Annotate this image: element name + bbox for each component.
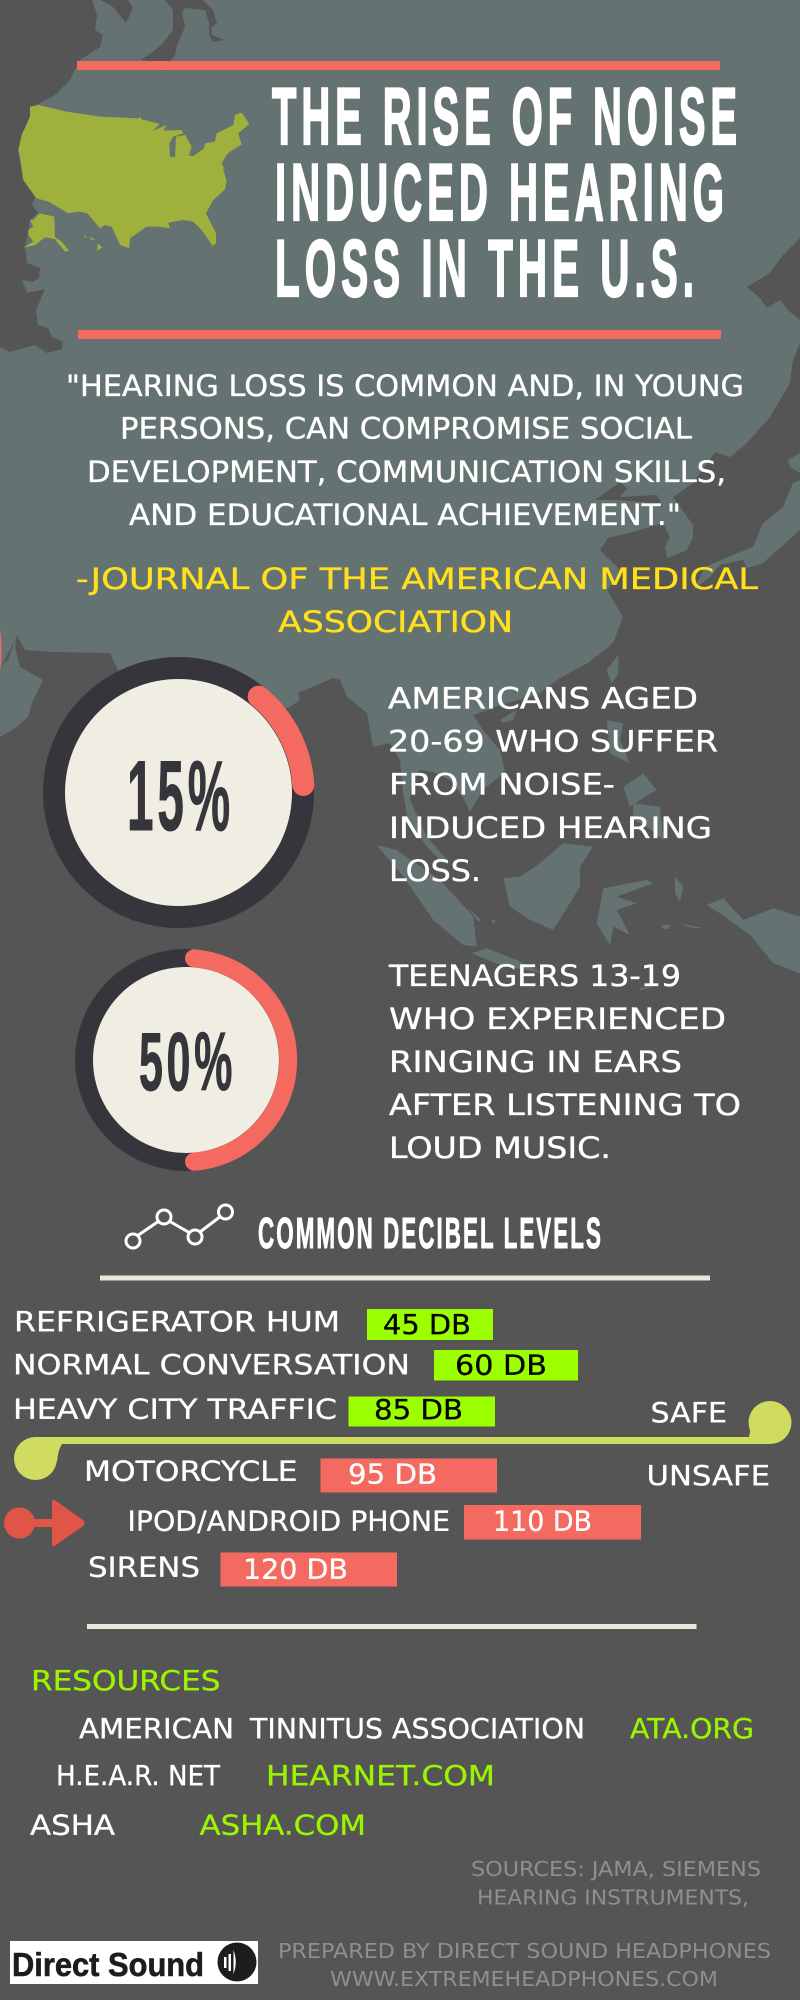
stat: 15 percent description: INDUCED HEARING (389, 811, 712, 845)
prepared by: PREPARED BY DIRECT SOUND HEADPHONES (278, 1939, 771, 1963)
row: sirens 120 dB: 120 DB (243, 1552, 348, 1586)
top red bar (77, 61, 720, 70)
row: normal conversation 60 dB (13, 1348, 578, 1382)
logo: Direct Sound: Direct Sound (12, 1946, 204, 1983)
quote attribution: ASSOCIATION (278, 605, 513, 639)
row: refrigerator hum 45 dB: REFRIGERATOR HUM (14, 1305, 340, 1338)
row: motorcycle 95 dB (84, 1454, 497, 1492)
bottom red bar (78, 330, 721, 339)
prepared by: WWW.EXTREMEHEADPHONES.COM (330, 1967, 718, 1991)
row: iPod/Android phone 110 dB (128, 1504, 641, 1540)
resource: American Tinnitus Association (79, 1712, 754, 1745)
stat: 15 percent description: FROM NOISE- (389, 768, 615, 802)
safe/unsafe divider (14, 1401, 792, 1480)
resource: H.E.A.R. Net (56, 1759, 495, 1792)
resource: ASHA (30, 1808, 366, 1842)
row: refrigerator hum 45 dB (14, 1305, 493, 1341)
sources (471, 1857, 761, 1910)
title (272, 72, 742, 314)
quote (66, 369, 744, 532)
icon: map of the United States (18, 105, 249, 252)
South-East Asian islands (377, 655, 800, 991)
row: normal conversation 60 dB: 60 DB (455, 1348, 547, 1382)
quote: AND EDUCATIONAL ACHIEVEMENT." (129, 498, 681, 532)
row: heavy city traffic 85 dB: 85 DB (374, 1393, 463, 1426)
world map background (0, 0, 800, 991)
stat: 50 percent description: LOUD MUSIC. (389, 1131, 611, 1165)
stat: 15 percent description: 20-69 WHO SUFFER (388, 724, 718, 758)
resources heading: RESOURCES (31, 1664, 220, 1697)
stat: 15 percent description (388, 682, 718, 888)
stat: 15 percent donut (43, 657, 314, 928)
row: refrigerator hum 45 dB: 45 DB (383, 1308, 471, 1341)
Japan (693, 480, 800, 590)
row: heavy city traffic 85 dB (13, 1392, 495, 1426)
resource: American Tinnitus Association: AMERICAN (79, 1712, 234, 1745)
stat: 50 percent description: AFTER LISTENING TO (389, 1088, 741, 1122)
row: sirens 120 dB: SIRENS (88, 1550, 200, 1584)
label: unsafe: UNSAFE (646, 1459, 770, 1492)
resource: ASHA: ASHA (30, 1808, 115, 1842)
sources: SOURCES: JAMA, SIEMENS (471, 1857, 761, 1881)
stat: 50 percent donut (75, 949, 297, 1171)
quote: "HEARING LOSS IS COMMON AND, IN YOUNG (66, 369, 744, 403)
dark water inlets (2, 0, 663, 665)
row: motorcycle 95 dB: MOTORCYCLE (84, 1454, 298, 1488)
stat: 50 percent donut: 50% (139, 1015, 236, 1108)
prepared by (278, 1939, 771, 1991)
quote attribution (76, 562, 758, 639)
resource: H.E.A.R. Net: HEARNET.COM (266, 1759, 495, 1792)
resource: H.E.A.R. Net: H.E.A.R. NET (56, 1759, 221, 1792)
stat: 50 percent description: RINGING IN EARS (389, 1045, 682, 1079)
quote: DEVELOPMENT, COMMUNICATION SKILLS, (87, 455, 726, 489)
resource: American Tinnitus Association: TINNITUS ASSOCIATION (249, 1712, 585, 1745)
row: iPod/Android phone 110 dB: IPOD/ANDROID PHONE (128, 1504, 450, 1538)
resource: American Tinnitus Association: ATA.ORG (630, 1712, 754, 1745)
arrow (4, 1500, 84, 1546)
row: motorcycle 95 dB: 95 DB (348, 1458, 437, 1490)
quote attribution: -JOURNAL OF THE AMERICAN MEDICAL (76, 562, 758, 596)
label: safe: SAFE (650, 1396, 727, 1429)
pink edge arc (0, 628, 2, 672)
stat: 50 percent description: WHO EXPERIENCED (389, 1002, 726, 1036)
row: iPod/Android phone 110 dB: 110 DB (493, 1504, 592, 1538)
sources: HEARING INSTRUMENTS, (477, 1886, 749, 1910)
resource: ASHA: ASHA.COM (200, 1808, 366, 1842)
stat: 50 percent description (388, 959, 741, 1165)
row: sirens 120 dB (88, 1550, 397, 1586)
stat: 15 percent description: LOSS. (389, 854, 481, 888)
icon: line chart (126, 1205, 232, 1248)
row: normal conversation 60 dB: NORMAL CONVERSATION (13, 1348, 410, 1381)
stat: 50 percent description: TEENAGERS 13-19 (388, 959, 681, 993)
quote: PERSONS, CAN COMPROMISE SOCIAL (120, 412, 692, 446)
stat: 15 percent donut: 15% (127, 740, 234, 851)
stat: 15 percent description: AMERICANS AGED (388, 682, 698, 716)
row: heavy city traffic 85 dB: HEAVY CITY TRAFFIC (13, 1392, 337, 1426)
